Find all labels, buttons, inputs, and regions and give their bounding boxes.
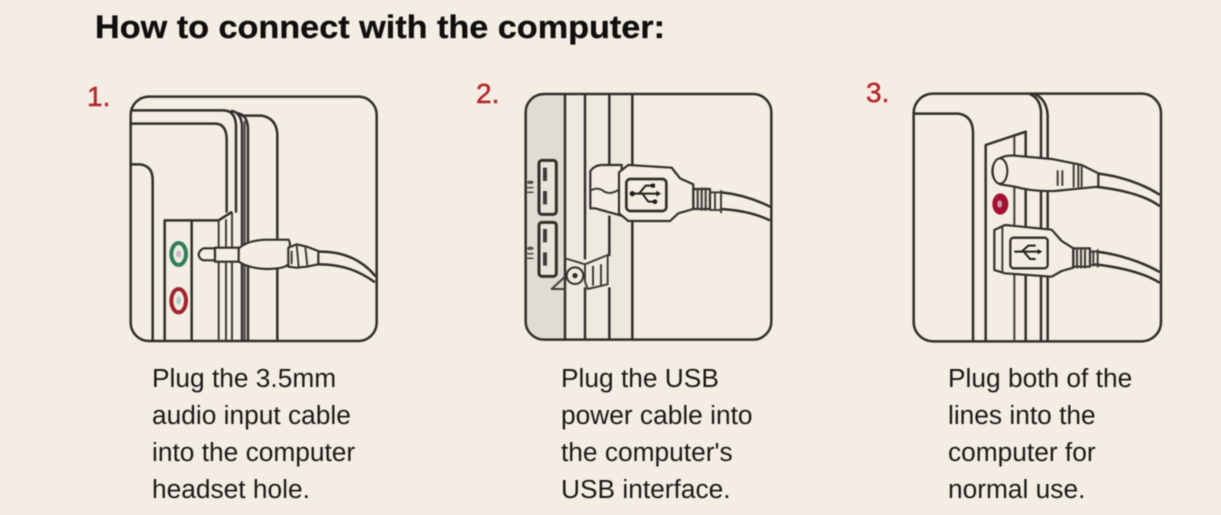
audio port dot: [567, 267, 583, 284]
step 3 caption: [948, 363, 1132, 504]
USB plug and cable: [994, 225, 1159, 282]
step 2 number: 2.: [476, 78, 499, 109]
step 1 number: 1.: [87, 81, 110, 112]
panel: step 3 both cables illustration: [914, 94, 1161, 341]
step 1 caption: [152, 363, 355, 504]
panel frame: [526, 94, 771, 340]
step 3 caption: normal use.: [948, 474, 1085, 504]
step 1 caption: headset hole.: [152, 474, 310, 504]
red microphone port: [171, 289, 186, 312]
audio plug and cable: [992, 156, 1159, 206]
step 2 caption: USB interface.: [561, 474, 731, 504]
red port: [992, 193, 1008, 215]
panel frame: [131, 97, 377, 341]
step 1 caption: audio input cable: [152, 400, 351, 430]
panel: step 2 USB illustration: [526, 94, 771, 340]
USB port labels: [528, 181, 533, 258]
shaded computer panel: [526, 94, 565, 339]
step 3 caption: Plug both of the: [948, 363, 1132, 393]
computer case lines: [131, 110, 277, 340]
panel: step 1 audio jack illustration: [131, 97, 377, 341]
USB plug and cable: [590, 165, 770, 221]
step 3 caption: computer for: [948, 437, 1096, 467]
upper USB port: [539, 160, 556, 214]
green audio port: [171, 243, 186, 265]
step 2 caption: Plug the USB: [561, 363, 719, 393]
computer case lines: [914, 94, 1048, 341]
title: How to connect with the computer:: [95, 9, 665, 45]
audio jack plug and cable: [199, 240, 375, 282]
step 3 number: 3.: [866, 77, 889, 108]
panel frame: [914, 94, 1161, 341]
step 3 caption: lines into the: [948, 400, 1096, 430]
step 2 caption: power cable into: [561, 400, 752, 430]
step 1 caption: into the computer: [152, 437, 355, 467]
step 1 caption: Plug the 3.5mm: [152, 363, 336, 393]
lower USB port: [539, 222, 556, 276]
step 2 caption: [561, 363, 752, 504]
step 2 caption: the computer's: [561, 437, 733, 467]
computer case lines: [552, 94, 632, 339]
